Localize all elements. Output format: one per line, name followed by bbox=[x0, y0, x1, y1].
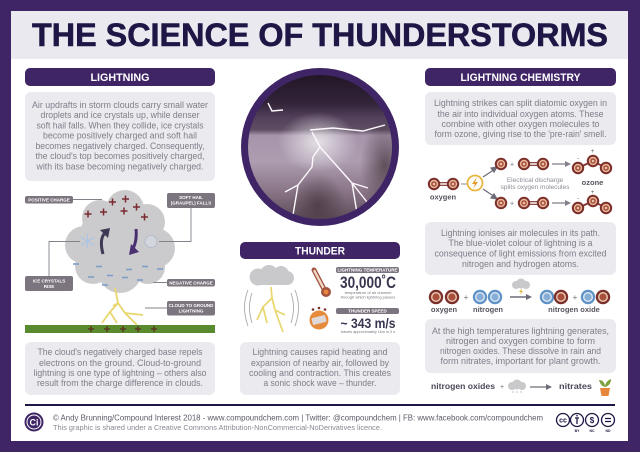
label: negative charge: NEGATIVE CHARGE bbox=[169, 280, 213, 286]
nitrogen oxide molecules bbox=[540, 290, 610, 304]
text block: nitrogen oxides: form nitrates, important for plant growth. bbox=[440, 356, 600, 366]
text block: nitrogen oxides: nitrogen and oxygen combine to form bbox=[446, 336, 595, 346]
licence icons: ND bbox=[605, 429, 611, 433]
label: positive charge bbox=[25, 196, 73, 204]
diagram: ozone formation bbox=[428, 149, 612, 214]
label: nitrates: nitrates bbox=[559, 381, 592, 391]
icon: small storm cloud bbox=[512, 278, 530, 295]
heading: lightning chemistry bbox=[425, 68, 616, 86]
labels: molecules: nitrogen bbox=[473, 305, 503, 314]
arrow head: falling hail bbox=[129, 244, 139, 255]
licence icons: NC bbox=[589, 429, 595, 433]
text block: nitrogen oxides: At the high temperatures lightning generates, bbox=[432, 326, 609, 336]
stat: thunder speed bbox=[336, 308, 399, 334]
text block: cloud to ground bbox=[25, 342, 215, 395]
icon: thermometer bbox=[314, 270, 331, 297]
label: oxygen: oxygen bbox=[430, 192, 457, 202]
text block: charge separation: with its base becoming negatively charged. bbox=[36, 162, 204, 172]
bottom row reaction: - bbox=[577, 196, 579, 202]
text block: ionisation: nitrogen and hydrogen atoms. bbox=[462, 259, 579, 269]
ground bbox=[25, 325, 215, 333]
text block: thunder: cooling and contraction. This creates bbox=[249, 368, 391, 378]
stat: lightning temperature: 30,000˚C bbox=[340, 273, 396, 292]
cloud bbox=[65, 190, 175, 293]
text block: ionisation: consequence of light emissions from excited bbox=[434, 248, 606, 258]
text block: charge separation bbox=[25, 92, 215, 181]
icon: potted plant bbox=[599, 379, 611, 396]
label: soft hail bbox=[167, 193, 215, 208]
labels: molecules bbox=[431, 305, 600, 314]
nitrogen oxide molecules: + bbox=[573, 293, 578, 302]
label: ice crystals: ICE CRYSTALS bbox=[33, 278, 65, 284]
text block: charge separation: soft hail falls. When they collide, ice crystals bbox=[36, 120, 204, 130]
callout lines bbox=[49, 200, 191, 308]
diagram: nitrates bbox=[431, 379, 611, 396]
icon: ice crystal bbox=[81, 234, 94, 249]
top row reaction: + bbox=[591, 149, 595, 155]
label: soft hail: SOFT HAIL bbox=[179, 195, 203, 200]
text block: thunder: Lightning causes rapid heating and bbox=[252, 347, 388, 357]
text block: cloud to ground: The cloud's negatively charged base repels bbox=[38, 347, 203, 357]
text block: ionisation: Lightning ionises air molecules in its path. bbox=[441, 228, 600, 238]
bottom row reaction: + bbox=[591, 190, 595, 196]
text block: ozone: Lightning strikes can split diatomic oxygen in bbox=[434, 98, 607, 108]
heading: thunder bbox=[240, 242, 400, 259]
plus: + bbox=[464, 293, 469, 302]
title band: THE SCIENCE OF THUNDERSTORMS bbox=[32, 17, 608, 53]
arrow: falling hail bbox=[132, 229, 136, 250]
heading: lightning chemistry: LIGHTNING CHEMISTRY bbox=[460, 72, 581, 84]
icon: electrical discharge bbox=[468, 176, 482, 190]
label: ozone: ozone bbox=[582, 178, 603, 187]
panel: thunder bbox=[240, 242, 400, 395]
text block: thunder: expansion of nearby air, followed by bbox=[251, 358, 389, 368]
footer bbox=[24, 412, 614, 433]
credits bbox=[53, 414, 543, 432]
title band bbox=[11, 11, 628, 59]
text block: charge separation: becomes negatively charged. Consequently, bbox=[36, 141, 204, 151]
licence icons: BY bbox=[575, 429, 580, 433]
text block: charge separation: become positively charged and soft hail bbox=[43, 130, 197, 140]
negative charges bbox=[73, 264, 163, 285]
heading: thunder: THUNDER bbox=[295, 246, 345, 258]
text block: cloud to ground: electrons on the ground. Cloud-to-ground bbox=[39, 358, 201, 368]
icon: stopwatch bbox=[310, 307, 328, 330]
stat: lightning temperature: through which lightning passes bbox=[341, 294, 395, 300]
photo: lightning in circle bbox=[241, 68, 399, 226]
bottom row reaction: + bbox=[510, 200, 514, 208]
caption: electrical discharge: splits oxygen molecules bbox=[501, 184, 570, 191]
caption: electrical discharge: Electrical discharge bbox=[507, 177, 564, 184]
label: ice crystals: RISE bbox=[44, 284, 54, 289]
arrows: split bbox=[483, 167, 497, 199]
arrow bbox=[510, 294, 532, 300]
icon: rain cloud bbox=[508, 380, 526, 393]
diagram: storm cloud charges bbox=[25, 190, 215, 333]
arrow head: updraft bbox=[100, 228, 110, 238]
lightning strike bbox=[102, 288, 143, 325]
plus: + bbox=[500, 384, 504, 391]
icon: soft hail bbox=[145, 236, 157, 248]
stat: lightning temperature: LIGHTNING TEMPERATURE bbox=[338, 268, 397, 273]
text block: charge separation: Air updrafts in storm clouds carry small water bbox=[32, 100, 208, 110]
positive charges bbox=[84, 196, 148, 220]
caption: electrical discharge bbox=[501, 177, 570, 191]
stat: thunder speed: THUNDER SPEED bbox=[348, 309, 387, 314]
divider bbox=[25, 404, 615, 406]
text block: charge separation: droplets and ice crystals up, while denser bbox=[40, 110, 200, 120]
text block: ozone: the air into individual oxygen atoms. These bbox=[438, 109, 604, 119]
nitrogen atoms bbox=[473, 290, 502, 304]
arrow bbox=[530, 384, 552, 390]
text block: ionisation bbox=[425, 222, 616, 275]
text block: ionisation: The blue-violet colour of lightning is a bbox=[448, 238, 592, 248]
logo: compound interest bbox=[24, 412, 44, 432]
credits: This graphic is shared under a Creative Commons Attribution-NonCommercial-NoDerivatives licence. bbox=[53, 423, 382, 432]
text block: thunder bbox=[240, 342, 400, 395]
text block: charge separation: the cloud's top becomes positively charged, bbox=[36, 151, 204, 161]
label: cloud to ground lightning: LIGHTNING bbox=[179, 308, 204, 314]
text block: nitrogen oxides: nitrogen oxides. These dissolve in rain and bbox=[440, 346, 601, 356]
heading: lightning bbox=[25, 68, 215, 86]
bottom row reaction bbox=[495, 190, 612, 214]
text block: nitrogen oxides bbox=[425, 319, 616, 373]
licence icons: cc bbox=[559, 418, 567, 424]
licence icons: $ bbox=[590, 416, 595, 425]
label: cloud to ground lightning bbox=[167, 301, 215, 316]
text block: cloud to ground: result from the charge difference in clouds. bbox=[37, 378, 203, 388]
connector bbox=[461, 183, 467, 185]
labels: molecules: oxygen bbox=[431, 305, 458, 314]
text block: cloud to ground: lightning is one type of lightning – others also bbox=[34, 368, 206, 378]
logo: compound interest: Ci bbox=[30, 418, 38, 428]
credits: © Andy Brunning/Compound Interest 2018 - www.compoundchem.com | Twitter: @compoundchem | FB: www.facebook.com/compoundchem bbox=[53, 414, 543, 422]
oxygen atoms bbox=[429, 290, 459, 304]
stat: lightning temperature: temperature of air channel bbox=[345, 290, 391, 295]
text block: ozone: form ozone, giving rise to the 'pre-rain' smell. bbox=[434, 129, 606, 139]
top row reaction: - bbox=[577, 156, 579, 162]
icon: thunder cloud with lightning bbox=[244, 265, 298, 332]
labels: molecules: nitrogen oxide bbox=[548, 305, 600, 314]
stat: thunder speed: travels approximately 1km in 3 s bbox=[341, 330, 395, 334]
oxygen molecule bbox=[428, 178, 459, 190]
label: cloud to ground lightning: CLOUD TO GROUND bbox=[169, 303, 214, 308]
top row reaction bbox=[495, 149, 612, 174]
panel: lightning bbox=[25, 68, 215, 395]
text block: ozone: combine with other oxygen molecules to bbox=[442, 119, 600, 129]
top row reaction: + bbox=[510, 162, 514, 168]
arrow: updraft bbox=[101, 232, 106, 254]
panel: lightning chemistry bbox=[425, 68, 616, 396]
label: ice crystals bbox=[25, 276, 73, 291]
label: nitrogen oxides: nitrogen oxides bbox=[431, 381, 495, 391]
text block: thunder: a sonic shock wave – thunder. bbox=[264, 378, 376, 388]
text block: ozone bbox=[425, 92, 616, 145]
ground charges bbox=[88, 326, 157, 332]
heading: lightning: LIGHTNING bbox=[90, 72, 150, 84]
label: positive charge: POSITIVE CHARGE bbox=[28, 198, 70, 202]
diagram: nitrogen oxide formation bbox=[429, 278, 610, 314]
licence icons bbox=[556, 414, 614, 433]
label: soft hail: (GRAUPEL) FALLS bbox=[171, 200, 211, 206]
label: negative charge bbox=[167, 279, 215, 286]
stat: thunder speed: ~ 343 m/s bbox=[340, 315, 396, 331]
stat: lightning temperature bbox=[336, 267, 399, 300]
